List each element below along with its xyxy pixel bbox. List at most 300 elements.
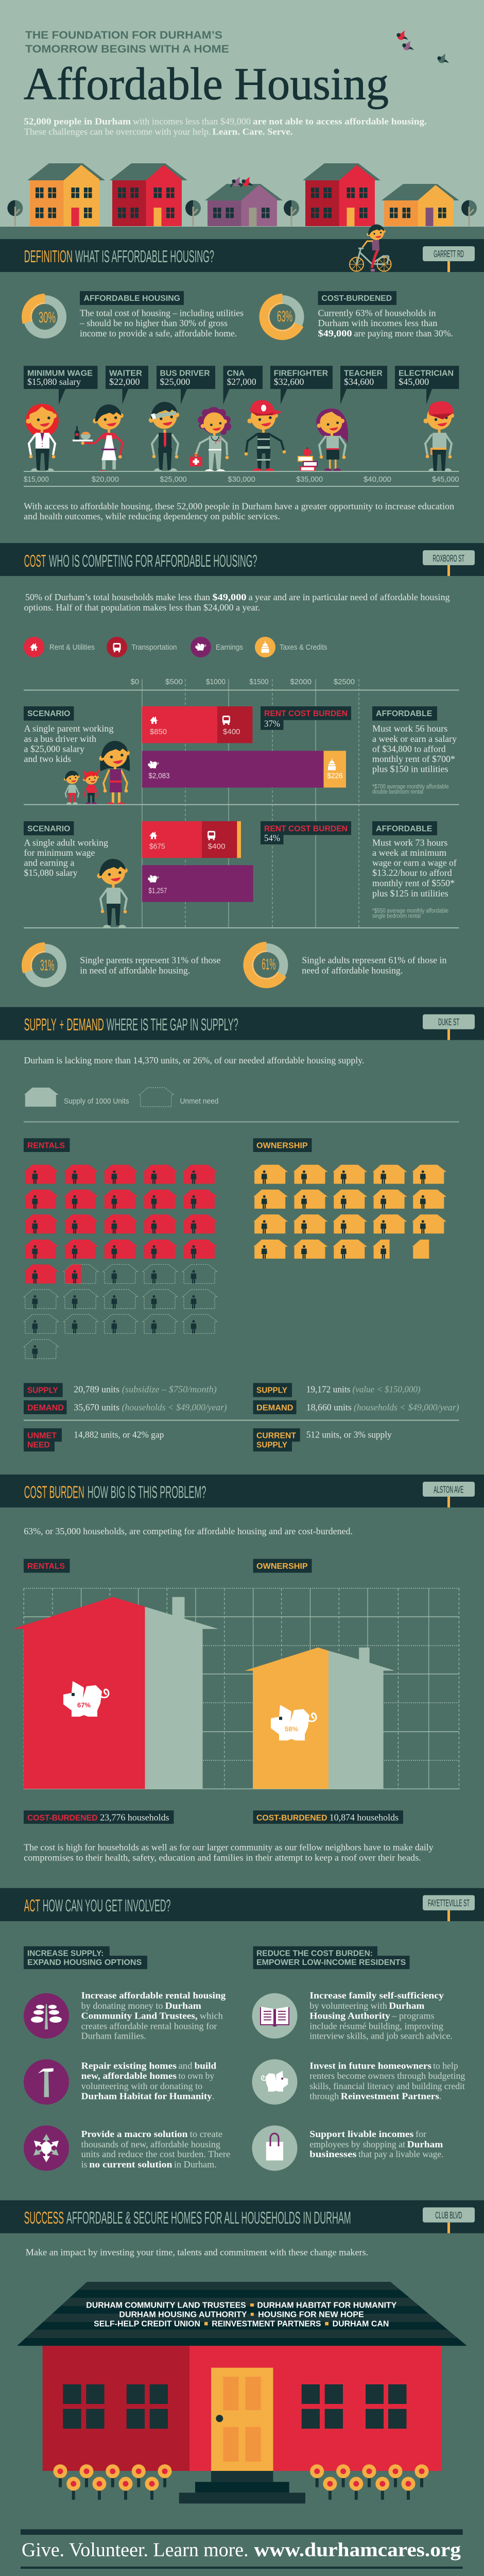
panel: definition header xyxy=(0,239,484,272)
chart axis: monthly dollars: $2500 xyxy=(334,677,355,686)
chart: expenses bars: $675 xyxy=(149,842,165,851)
icon: teacher xyxy=(298,409,348,471)
text xyxy=(309,2060,465,2101)
partner list: HOUSING FOR NEW HOPE xyxy=(258,2310,364,2319)
tag: increase supply: EXPAND HOUSING OPTIONS xyxy=(27,1958,142,1967)
text: Invest in future homeowners xyxy=(309,2060,431,2071)
tag: rentals: RENTALS xyxy=(27,1141,65,1150)
illustration: big house xyxy=(0,2282,484,2503)
icon: hammer xyxy=(24,2059,69,2105)
text: cost-burdened definition: Durham with incomes less than xyxy=(318,318,438,328)
text: affordable scenario 2: Must work 73 hours xyxy=(372,838,447,848)
text: scenario description xyxy=(24,723,113,764)
icon: trees xyxy=(7,200,477,226)
icon: cracked piggy bank 58%: 58% xyxy=(285,1725,298,1733)
chart axis: monthly dollars: $0 xyxy=(131,677,139,686)
axis: salary scale: $40,000 xyxy=(364,475,391,484)
text: affordable scenario 1: a week or earn a salary xyxy=(372,734,457,744)
heading: DEMAND xyxy=(67,1015,104,1034)
panel: cost burden header xyxy=(0,1475,484,1507)
icon: piggy bank xyxy=(252,2059,298,2105)
text: which xyxy=(200,2010,223,2021)
text: cost-burdened definition xyxy=(318,308,453,338)
chart: 63% donut: 63% xyxy=(277,308,292,325)
stats: rentals xyxy=(24,1383,227,1451)
callout: bus driver xyxy=(157,366,215,404)
callout: teacher xyxy=(340,366,387,404)
callout: rent cost burden 37%: 37% xyxy=(264,719,280,729)
text: supply intro: Durham is lacking more than 14,370 units, or 26%, of our needed affordable housing supply. xyxy=(24,1055,364,1065)
stats: rentals: DEMAND xyxy=(27,1403,64,1412)
text: and xyxy=(178,2060,193,2071)
tag: affordable housing xyxy=(80,291,184,305)
icon: roof birds xyxy=(231,177,253,187)
text: that pay a livable wage. xyxy=(358,2149,444,2159)
text: interview skills, and job search advice. xyxy=(309,2031,453,2041)
intro text: with incomes less than $49,000 xyxy=(133,116,251,127)
tag: affordable xyxy=(372,821,437,835)
heading: SUPPLY xyxy=(24,1015,57,1034)
street sign xyxy=(423,1895,475,1921)
icon: parent and kids xyxy=(64,741,130,804)
legend xyxy=(24,1088,218,1107)
chart: income bar: $1,257 xyxy=(148,886,167,895)
partner list: REINVESTMENT PARTNERS xyxy=(212,2319,321,2328)
tag: rentals xyxy=(24,1559,70,1573)
icon: waiter xyxy=(73,404,124,471)
chart: income bars xyxy=(142,751,346,788)
text: to help xyxy=(433,2060,458,2071)
street sign: DUKE ST xyxy=(438,1017,459,1027)
text: opportunity paragraph: and health outcomes, while reducing dependency on public services. xyxy=(24,511,280,521)
text: cost intro xyxy=(24,592,450,613)
panel: definition stats xyxy=(22,291,453,340)
stats: ownership xyxy=(253,1383,459,1451)
heading xyxy=(24,1483,206,1502)
heading: DEFINITION xyxy=(24,247,73,266)
footnote xyxy=(372,784,449,795)
tag: affordable: AFFORDABLE xyxy=(376,709,432,718)
text: affordable scenario 2: a week at minimum xyxy=(372,848,446,858)
tag: ownership: OWNERSHIP xyxy=(256,1141,308,1150)
icon: red tall house xyxy=(110,163,187,226)
text xyxy=(81,2129,230,2170)
stats: rentals: 35,670 units xyxy=(74,1402,119,1412)
text: affordable scenario 1: monthly rent of $700* xyxy=(372,754,455,764)
door xyxy=(211,2368,273,2471)
text: single parents xyxy=(80,955,221,975)
chart: income bar xyxy=(142,865,253,902)
tag: reduce cost burden xyxy=(253,1946,410,1969)
text: cost-burdened definition: Currently 63% of households in xyxy=(318,308,436,318)
item: future homeowners xyxy=(252,2059,465,2105)
item: rental housing xyxy=(24,1990,226,2041)
text: burden closing: compromises to their health, safety, education and families in their attempt to keep a roof over their heads. xyxy=(24,1853,421,1863)
windows xyxy=(63,2384,407,2429)
chart: 31% donut xyxy=(22,942,62,983)
text: scenario description: A single parent working xyxy=(24,723,113,734)
callout: CNA xyxy=(223,366,263,404)
text: by volunteering with xyxy=(309,2001,387,2011)
tag: affordable: AFFORDABLE xyxy=(376,824,432,833)
street sign xyxy=(423,2207,475,2233)
panel: household share xyxy=(22,942,446,988)
intro text: These challenges can be overcome with your help. xyxy=(24,127,211,137)
axis: salary scale: $25,000 xyxy=(160,475,187,484)
axis: salary scale xyxy=(24,471,459,487)
tag: ownership: OWNERSHIP xyxy=(256,1562,308,1571)
text: Increase affordable rental housing xyxy=(81,1990,226,2001)
icon: shopping bag xyxy=(252,2126,298,2171)
icon: red tall house xyxy=(303,163,381,226)
icon: ownership house xyxy=(245,1648,394,1789)
callout: minimum wage: $15,080 salary xyxy=(27,377,81,387)
tag: affordable xyxy=(372,706,437,721)
tag: cost-burdened: COST-BURDENED xyxy=(321,294,392,303)
chart: 31% donut: 31% xyxy=(40,957,55,974)
text: affordable definition xyxy=(79,308,244,338)
partner list: SELF-HELP CREDIT UNION xyxy=(94,2319,200,2328)
text: by donating money to xyxy=(81,2001,163,2011)
text: Increase family self-sufficiency xyxy=(309,1990,444,2001)
item: macro solution xyxy=(24,2126,230,2171)
text: . xyxy=(439,2091,442,2101)
item: self sufficiency xyxy=(252,1990,453,2041)
footnote: double bedroom rental xyxy=(372,789,423,795)
heading xyxy=(24,247,214,266)
text: affordable scenario 1: Must work 56 hours xyxy=(372,723,447,734)
intro text: Learn. Care. Serve. xyxy=(212,127,292,137)
text: opportunity paragraph: With access to affordable housing, these 52,000 people in Durham have a greater opportunity to increase education xyxy=(24,501,454,512)
tag: reduce cost burden: REDUCE THE COST BURDEN: xyxy=(256,1949,373,1958)
item: livable incomes xyxy=(252,2126,444,2171)
axis: salary scale: $15,000 xyxy=(24,475,49,484)
legend: Unmet need xyxy=(180,1097,218,1106)
tag: ownership xyxy=(253,1138,312,1152)
heading xyxy=(24,1015,238,1034)
stats: ownership: DEMAND xyxy=(256,1403,293,1412)
stats: rentals: (subsidize – $750/month) xyxy=(122,1384,217,1395)
text: opportunity paragraph xyxy=(24,501,454,521)
chart: expenses bars: $400 xyxy=(208,842,226,851)
tag: cost-burdened xyxy=(318,291,396,305)
heading xyxy=(24,2208,351,2227)
text: single parents: in need of affordable housing. xyxy=(80,965,190,975)
text xyxy=(309,1990,453,2041)
intro text xyxy=(24,116,427,137)
icon: purple short house xyxy=(205,184,283,226)
item: repair homes xyxy=(24,2059,216,2105)
panel: act header xyxy=(0,1888,484,1921)
walls xyxy=(43,2346,441,2471)
text: burden closing xyxy=(24,1842,434,1863)
icon: single adult xyxy=(97,859,128,928)
text: single adults xyxy=(302,955,447,975)
callout: rent cost burden 54%: RENT COST BURDEN xyxy=(264,824,348,833)
kicker heading: THE FOUNDATION FOR DURHAM’S xyxy=(25,29,222,41)
icon: rentals house xyxy=(12,1597,218,1789)
callout: teacher: TEACHER xyxy=(344,369,383,378)
icon: cracked piggy bank 67% xyxy=(63,1681,109,1717)
text: cost intro: 50% of Durham’s total households make less than xyxy=(25,592,210,602)
tag: increase supply: INCREASE SUPPLY: xyxy=(27,1949,103,1958)
icon: firefighter xyxy=(245,400,286,471)
tag: rentals burdened: COST-BURDENED xyxy=(27,1814,97,1822)
panel: success header xyxy=(0,2200,484,2233)
text: for xyxy=(416,2129,426,2139)
icon: arrows xyxy=(24,2126,69,2171)
text: affordable definition: – should be no higher than 30% of gross xyxy=(79,318,228,328)
chart: expenses bars xyxy=(142,821,241,858)
chart: expenses bars: $400 xyxy=(223,727,240,736)
street sign xyxy=(423,1482,475,1507)
axis: salary scale: $45,000 xyxy=(432,475,459,484)
panel: supply demand header xyxy=(0,1007,484,1040)
text: Durham xyxy=(165,2001,201,2011)
icon: cracked piggy bank 67%: 67% xyxy=(77,1701,91,1709)
callout: bus driver: BUS DRIVER xyxy=(160,369,210,378)
street sign xyxy=(423,1014,475,1040)
text: Community Land Trustees, xyxy=(81,2010,198,2021)
text: single adults: Single adults represent 61% of those in xyxy=(302,955,447,965)
stats: rentals: UNMET xyxy=(27,1432,57,1440)
text: scenario description: and earning a xyxy=(24,858,75,868)
text: scenario description: for minimum wage xyxy=(24,848,95,858)
text: Reinvestment Partners xyxy=(341,2091,439,2101)
callout: firefighter: $32,600 xyxy=(274,377,304,387)
stats: rentals: (households < $49,000/year) xyxy=(122,1402,227,1413)
text: affordable scenario 2: $13.22/hour to afford xyxy=(372,868,452,878)
tag: rentals burdened: 23,776 households xyxy=(100,1812,169,1822)
call to action: Give. Volunteer. Learn more. xyxy=(22,2539,249,2561)
callout: waiter: $22,000 xyxy=(109,377,140,387)
footnote: single bedroom rental xyxy=(372,913,421,920)
text: units and reduce the cost burden. There xyxy=(81,2149,230,2159)
text: is xyxy=(81,2159,88,2170)
text: scenario description xyxy=(24,838,108,878)
icon: cyclist xyxy=(350,225,391,272)
chart: 61% donut xyxy=(243,942,286,988)
stats: ownership: SUPPLY xyxy=(256,1386,288,1395)
text: in Durham. xyxy=(174,2159,217,2170)
text: affordable scenario 2: plus $125 in utilities xyxy=(372,888,448,899)
chart: income bars: $226 xyxy=(327,772,343,781)
text: scenario description: and two kids xyxy=(24,754,71,764)
legend xyxy=(24,637,327,657)
text: cost-burdened definition: are paying more than 30%. xyxy=(354,328,453,338)
icon: orange tall house xyxy=(27,163,105,226)
heading: COST xyxy=(24,551,46,570)
stats: ownership: (value < $150,000) xyxy=(353,1384,420,1395)
chart: expenses bars: $850 xyxy=(150,727,167,736)
callout: firefighter: FIREFIGHTER xyxy=(274,369,328,378)
kicker heading: TOMORROW BEGINS WITH A HOME xyxy=(25,43,229,55)
partner list: DURHAM HABITAT FOR HUMANITY xyxy=(257,2301,397,2310)
flowers right xyxy=(310,2464,428,2500)
text: affordable scenario 2 xyxy=(372,838,457,899)
axis: salary scale: $35,000 xyxy=(297,475,323,484)
panel: cost header xyxy=(0,543,484,576)
text: affordable scenario 1: plus $150 in utilities xyxy=(372,764,448,774)
stats: ownership: CURRENT xyxy=(256,1432,297,1440)
stats: rentals: SUPPLY xyxy=(27,1386,58,1395)
text: cost intro: options. Half of that population makes less than $24,000 a year. xyxy=(24,602,260,613)
callout: electrician: ELECTRICIAN xyxy=(399,369,454,378)
text: . xyxy=(212,2091,214,2101)
heading: SUCCESS xyxy=(24,2208,64,2227)
tag: ownership burdened: COST-BURDENED xyxy=(256,1814,327,1822)
text: cost-burdened definition: $49,000 xyxy=(318,328,352,338)
street sign xyxy=(423,550,475,576)
chart axis: monthly dollars: $1000 xyxy=(206,677,226,686)
text: cost intro: a year and are in particular need of affordable housing xyxy=(249,592,450,602)
tag: ownership burdened: 10,874 households xyxy=(330,1812,399,1822)
tag: reduce cost burden: EMPOWER LOW-INCOME RESIDENTS xyxy=(256,1958,406,1967)
text: to own by xyxy=(178,2071,214,2081)
text: – programs xyxy=(391,2010,435,2021)
text: scenario description: $15,080 salary xyxy=(24,868,77,878)
callout: rent cost burden 37% xyxy=(261,706,351,730)
chart axis: monthly dollars: $500 xyxy=(165,677,183,686)
panel: hero xyxy=(0,0,484,227)
heading: + xyxy=(60,1015,64,1034)
text: affordable scenario 1 xyxy=(372,723,457,774)
steps xyxy=(179,2471,305,2503)
callout: electrician: $45,000 xyxy=(399,377,429,387)
icon: book xyxy=(252,1993,298,2039)
text xyxy=(81,1990,226,2041)
intro text: 52,000 people in Durham xyxy=(24,116,131,127)
chart: 61% donut: 61% xyxy=(262,956,275,973)
text: no current solution xyxy=(89,2159,172,2170)
callout: teacher: $34,600 xyxy=(344,377,374,387)
text: to create xyxy=(190,2129,222,2139)
tag: ownership xyxy=(253,1559,312,1573)
text: build xyxy=(195,2060,216,2071)
text: include résumé building, improving xyxy=(309,2021,443,2031)
icon: cracked piggy bank 58% xyxy=(271,1705,316,1740)
stats: rentals: 14,882 units, or 42% gap xyxy=(74,1430,164,1440)
chart axis: monthly dollars xyxy=(24,677,459,927)
footnote: *$550 average monthly affordable xyxy=(372,908,448,914)
callout: rent cost burden 37%: RENT COST BURDEN xyxy=(264,709,348,718)
stats: ownership: (households < $49,000/year) xyxy=(354,1402,459,1413)
panel: cost header: WHO IS COMPETING FOR AFFORDABLE HOUSING? xyxy=(49,551,257,570)
partner list: DURHAM CAN xyxy=(333,2319,389,2328)
stats: ownership: SUPPLY xyxy=(256,1440,288,1449)
legend: Taxes & Credits xyxy=(280,643,327,652)
call to action: www.durhamcares.org xyxy=(254,2539,461,2561)
panel: supply demand header: WHERE IS THE GAP IN SUPPLY? xyxy=(107,1015,238,1034)
panel: scenario 2 xyxy=(24,821,457,928)
text: Durham xyxy=(407,2139,443,2149)
chart: ownership house pictogram xyxy=(253,1165,446,1259)
callout: rent cost burden 54% xyxy=(261,821,351,844)
callout: CNA: CNA xyxy=(227,369,245,378)
text: new, affordable homes xyxy=(81,2071,177,2081)
stats: rentals: NEED xyxy=(27,1440,50,1449)
panel: job salaries xyxy=(24,366,459,521)
footnote: *$700 average monthly affordable xyxy=(372,784,449,790)
tag: affordable housing: AFFORDABLE HOUSING xyxy=(83,294,180,303)
text: volunteering with or donating to xyxy=(81,2081,202,2091)
legend: Transportation xyxy=(131,643,177,652)
legend: Rent & Utilities xyxy=(49,643,95,652)
callout: minimum wage xyxy=(24,366,98,404)
stats: ownership: 19,172 units xyxy=(306,1384,350,1395)
text: affordable definition: The total cost of housing – including utilities xyxy=(80,308,244,318)
text: single parents: Single parents represent 31% of those xyxy=(80,955,221,965)
call to action xyxy=(21,2529,463,2569)
icon: bus driver xyxy=(149,402,179,471)
tag: scenario xyxy=(24,821,74,835)
roof with partners xyxy=(0,2282,484,2346)
tag: rentals xyxy=(24,1138,70,1152)
text xyxy=(81,2060,216,2101)
chart: burden grid xyxy=(24,1588,459,1789)
icon: nurse assistant xyxy=(189,407,231,471)
partner list xyxy=(86,2301,397,2328)
chart axis: monthly dollars: $1500 xyxy=(249,677,269,686)
heading xyxy=(24,551,257,570)
kicker heading xyxy=(25,29,229,55)
chart: income bars: $2,083 xyxy=(148,772,170,781)
icon: tree xyxy=(24,1993,69,2039)
text: affordable scenario 2: monthly rent of $550* xyxy=(372,878,455,888)
stats: rentals: 20,789 units xyxy=(74,1384,119,1395)
text: skills, financial literacy and building credit xyxy=(309,2081,465,2091)
text: Support livable incomes xyxy=(309,2129,413,2139)
text: burden closing: The cost is high for households as well as for our larger community as our fellow neighbors have to make daily xyxy=(24,1842,434,1853)
text: affordable scenario 1: of $34,800 to afford xyxy=(372,744,446,754)
callout: firefighter xyxy=(270,366,333,404)
callout: minimum wage: MINIMUM WAGE xyxy=(27,369,93,378)
text: Housing Authority xyxy=(309,2010,390,2021)
text xyxy=(309,2129,444,2159)
chart: expenses bars xyxy=(142,706,252,743)
text: affordable definition: income to provide a safe, affordable home. xyxy=(80,328,237,338)
axis: salary scale: $30,000 xyxy=(228,475,255,484)
heading: ACT xyxy=(24,1896,40,1915)
text: renters become owners through budgeting xyxy=(309,2071,465,2081)
callout: waiter xyxy=(106,366,148,404)
heading: COST BURDEN xyxy=(24,1483,84,1502)
text: success intro: Make an impact by investing your time, talents and commitment with these change makers. xyxy=(26,2247,368,2257)
tag: increase supply xyxy=(24,1946,147,1969)
text: Durham Habitat for Humanity xyxy=(81,2091,212,2101)
tag: rentals burdened xyxy=(24,1810,174,1824)
panel: act header: HOW CAN YOU GET INVOLVED? xyxy=(43,1896,171,1915)
text: employees by shopping at xyxy=(309,2139,405,2149)
legend: Earnings xyxy=(216,643,243,652)
heading xyxy=(24,1896,170,1915)
panel: definition header: WHAT IS AFFORDABLE HOUSING? xyxy=(75,247,214,266)
chart: 63% donut xyxy=(260,294,303,340)
title: Affordable Housing xyxy=(24,59,389,110)
text: Repair existing homes xyxy=(81,2060,177,2071)
text: businesses xyxy=(309,2149,356,2159)
tag: scenario xyxy=(24,706,74,721)
tag: rentals: RENTALS xyxy=(27,1562,65,1571)
callout: electrician xyxy=(395,366,459,404)
icon: orange short house xyxy=(382,184,459,226)
partner list: DURHAM HOUSING AUTHORITY xyxy=(119,2310,247,2319)
text: scenario description: as a bus driver with xyxy=(24,734,96,744)
chart axis: monthly dollars: $2000 xyxy=(290,677,312,686)
panel: scenario 1 xyxy=(24,706,457,804)
intro text: are not able to access affordable housing. xyxy=(253,116,427,127)
text: through xyxy=(309,2091,339,2101)
